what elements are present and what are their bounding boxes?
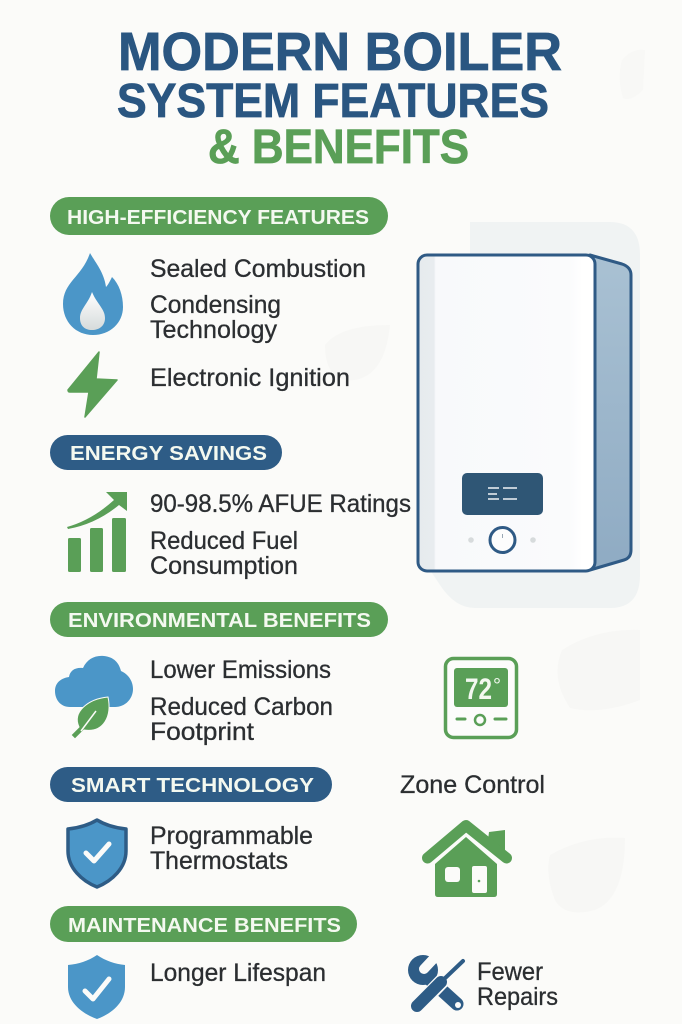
icon: wrench and screwdriver	[408, 954, 463, 1008]
boiler display	[462, 473, 543, 515]
heading: high-efficiency features	[50, 197, 388, 235]
text: fewer repairs: Fewer	[477, 958, 543, 986]
icon: blue shield with check	[68, 820, 126, 887]
text: reduced carbon footprint: Footprint	[150, 718, 254, 746]
panel: environmental benefits	[50, 602, 516, 746]
icon: thermostat: °	[493, 675, 501, 697]
text: reduced fuel consumption: Consumption	[150, 552, 298, 580]
heading: smart technology	[50, 767, 332, 802]
text: programmable thermostats: Thermostats	[150, 847, 288, 875]
title: SYSTEM FEATURES	[117, 75, 549, 128]
heading: maintenance benefits: MAINTENANCE BENEFITS	[68, 914, 341, 937]
boiler illustration	[418, 222, 640, 608]
heading: maintenance benefits	[50, 906, 357, 942]
icon: thermostat: 72	[465, 673, 492, 706]
panel: maintenance benefits	[50, 906, 558, 1019]
text: reduced fuel consumption	[150, 527, 298, 580]
text: longer lifespan: Longer Lifespan	[150, 959, 326, 987]
icon: rising bar chart	[67, 492, 127, 572]
text: electronic ignition: Electronic Ignition	[150, 364, 350, 392]
text: zone control: Zone Control	[400, 771, 545, 799]
icon: cloud with leaf	[55, 656, 133, 739]
text: reduced fuel consumption: Reduced Fuel	[150, 527, 298, 555]
text: condensing technology	[150, 291, 281, 344]
icon: thermostat	[446, 658, 516, 738]
heading: high-efficiency features: HIGH-EFFICIENCY FEATURES	[67, 206, 369, 229]
text: reduced carbon footprint	[150, 693, 333, 746]
panel: high-efficiency features	[50, 197, 388, 417]
panel: smart technology	[50, 767, 545, 897]
heading: smart technology: SMART TECHNOLOGY	[71, 774, 314, 797]
icon: shield with check	[68, 955, 125, 1019]
icon: flame with water drop	[63, 253, 123, 335]
boiler dial	[468, 528, 536, 552]
text: fewer repairs: Repairs	[477, 983, 558, 1011]
text: programmable thermostats: Programmable	[150, 822, 313, 850]
text: condensing technology: Technology	[150, 316, 277, 344]
heading: energy savings	[50, 435, 282, 470]
text: lower emissions: Lower Emissions	[150, 656, 331, 684]
heading: environmental benefits: ENVIRONMENTAL BENEFITS	[68, 609, 371, 632]
icon: lightning bolt	[68, 352, 117, 417]
text: sealed combustion: Sealed Combustion	[150, 255, 366, 283]
heading: environmental benefits	[50, 602, 388, 637]
text: condensing technology: Condensing	[150, 291, 281, 319]
text: fewer repairs	[477, 958, 558, 1011]
text: programmable thermostats	[150, 822, 313, 875]
panel: energy savings	[50, 435, 411, 580]
icon: house	[428, 826, 506, 897]
text: reduced carbon footprint: Reduced Carbon	[150, 693, 333, 721]
title: & BENEFITS	[208, 121, 469, 174]
heading: energy savings: ENERGY SAVINGS	[70, 442, 267, 465]
text: afue ratings: 90-98.5% AFUE Ratings	[150, 490, 411, 518]
title: MODERN BOILER	[118, 22, 562, 82]
title	[117, 22, 562, 174]
